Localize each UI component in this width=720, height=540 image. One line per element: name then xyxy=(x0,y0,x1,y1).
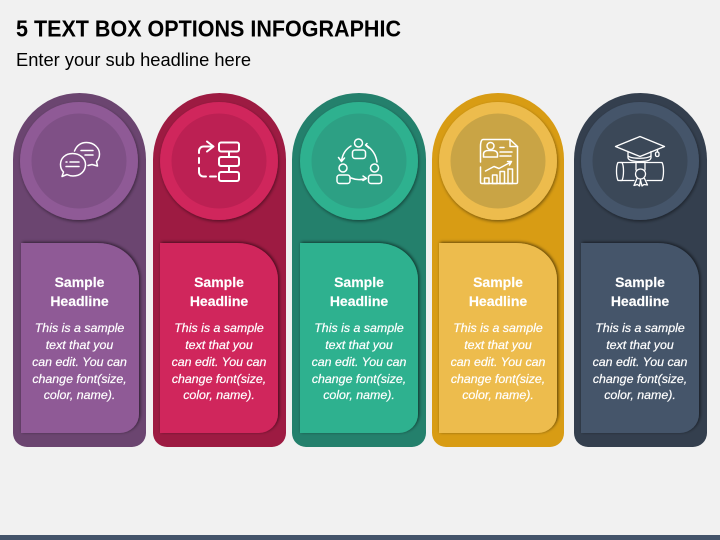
body text: change font(size, xyxy=(593,372,687,386)
icon ring xyxy=(20,102,138,220)
panel: amber xyxy=(432,93,564,447)
body text: color, name). xyxy=(462,388,534,402)
body text: text that you xyxy=(606,338,674,352)
headline: Headline xyxy=(50,293,109,309)
headline: Sample xyxy=(473,274,523,290)
body text: can edit. You can xyxy=(312,355,407,369)
icon disc xyxy=(312,114,406,208)
panel body xyxy=(432,93,564,447)
body text: This is a sample xyxy=(174,321,264,335)
body text: This is a sample xyxy=(35,321,124,335)
body text: This is a sample xyxy=(314,321,404,335)
body text: color, name). xyxy=(323,388,395,402)
body text: text that you xyxy=(46,338,113,352)
body text: color, name). xyxy=(183,388,255,402)
headline: Sample xyxy=(55,274,105,290)
body text: text that you xyxy=(185,338,253,352)
body text: change font(size, xyxy=(451,372,545,386)
headline: Sample xyxy=(334,274,384,290)
panel body xyxy=(153,93,286,447)
text card xyxy=(581,243,699,433)
panel body xyxy=(574,93,707,447)
footer bar xyxy=(0,535,720,540)
body text: change font(size, xyxy=(32,372,127,386)
headline: Headline xyxy=(330,293,388,309)
title: 5 TEXT BOX OPTIONS INFOGRAPHIC xyxy=(16,16,401,42)
icon disc xyxy=(450,114,546,208)
body text: change font(size, xyxy=(312,372,406,386)
panel body xyxy=(13,93,146,447)
body text: change font(size, xyxy=(172,372,266,386)
icon: flow chart xyxy=(199,142,239,181)
panel body xyxy=(292,93,426,447)
subtitle: Enter your sub headline here xyxy=(16,50,251,70)
icon disc xyxy=(32,114,126,208)
headline: Headline xyxy=(469,293,527,309)
body text: This is a sample xyxy=(453,321,543,335)
panel: purple xyxy=(13,93,146,447)
body text: This is a sample xyxy=(595,321,685,335)
icon: graduation cap and diploma xyxy=(616,136,664,186)
body text: text that you xyxy=(464,338,532,352)
icon disc xyxy=(592,114,688,208)
body text: can edit. You can xyxy=(451,355,546,369)
icon disc xyxy=(172,114,266,208)
icon ring xyxy=(581,102,699,220)
headline: Headline xyxy=(190,293,248,309)
headline: Sample xyxy=(194,274,244,290)
icon ring xyxy=(300,102,418,220)
body text: can edit. You can xyxy=(32,355,127,369)
icon ring xyxy=(439,102,557,220)
text card xyxy=(21,243,139,433)
body text: text that you xyxy=(325,338,393,352)
headline: Headline xyxy=(611,293,669,309)
headline: Sample xyxy=(615,274,665,290)
body text: can edit. You can xyxy=(172,355,267,369)
text card xyxy=(300,243,418,433)
icon: team cycle xyxy=(337,139,382,184)
panel: green xyxy=(292,93,426,447)
text card xyxy=(160,243,278,433)
panel: crimson xyxy=(153,93,286,447)
icon ring xyxy=(160,102,278,220)
text card xyxy=(439,243,557,433)
body text: color, name). xyxy=(604,388,676,402)
body text: color, name). xyxy=(44,388,115,402)
body text: can edit. You can xyxy=(593,355,688,369)
icon: report document xyxy=(480,140,518,184)
panel: slate xyxy=(574,93,707,447)
icon: speech bubbles xyxy=(60,142,100,176)
